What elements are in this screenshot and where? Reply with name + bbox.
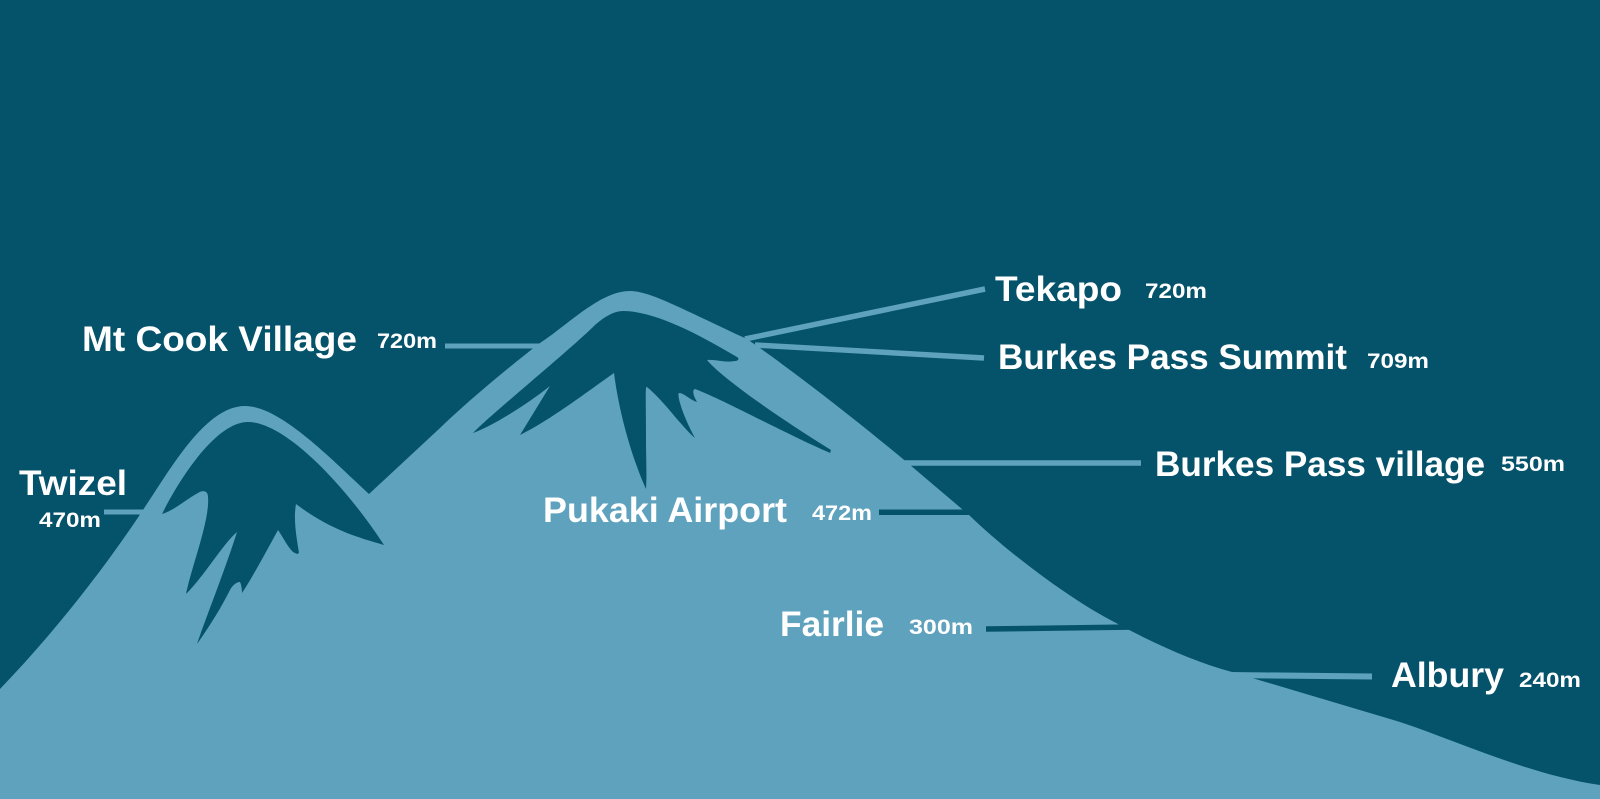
leader line: Albury xyxy=(1228,675,1372,676)
label: Burkes Pass Summit: 709m xyxy=(1367,349,1429,373)
label: Tekapo: 720m xyxy=(1145,279,1207,303)
label: Tekapo xyxy=(995,270,1207,309)
leader line: Mt Cook Village xyxy=(445,344,545,348)
label: Mt Cook Village: 720m xyxy=(377,329,437,353)
label: Twizel: 470m xyxy=(39,508,101,532)
mountain silhouette xyxy=(0,291,1600,799)
label: Albury: 240m xyxy=(1519,668,1581,692)
leader line: Twizel xyxy=(104,510,144,514)
label: Burkes Pass village: 550m xyxy=(1501,452,1565,476)
label: Pukaki Airport: 472m xyxy=(812,501,872,525)
leader line: Burkes Pass village xyxy=(900,460,1141,466)
leader line: Fairlie xyxy=(986,627,1135,629)
label: Twizel: Twizel xyxy=(19,464,127,503)
leader line: Pukaki Airport xyxy=(879,510,971,515)
label: Fairlie: Fairlie xyxy=(780,605,884,644)
label: Albury: Albury xyxy=(1391,656,1505,695)
label: Mt Cook Village: Mt Cook Village xyxy=(82,320,357,359)
label: Tekapo: Tekapo xyxy=(995,270,1122,309)
leader line: Burkes Pass Summit xyxy=(755,345,984,358)
label: Burkes Pass Summit: Burkes Pass Summit xyxy=(998,338,1347,377)
label: Fairlie: 300m xyxy=(909,615,973,639)
snow cap: Twizel peak xyxy=(162,422,384,644)
label: Pukaki Airport: Pukaki Airport xyxy=(543,491,787,530)
label: Twizel xyxy=(19,464,127,532)
label: Fairlie xyxy=(780,605,973,644)
leader line: Tekapo xyxy=(745,289,985,339)
snow cap: main peak xyxy=(473,311,831,489)
label: Burkes Pass village: Burkes Pass village xyxy=(1155,445,1485,484)
label: Albury xyxy=(1391,656,1581,695)
